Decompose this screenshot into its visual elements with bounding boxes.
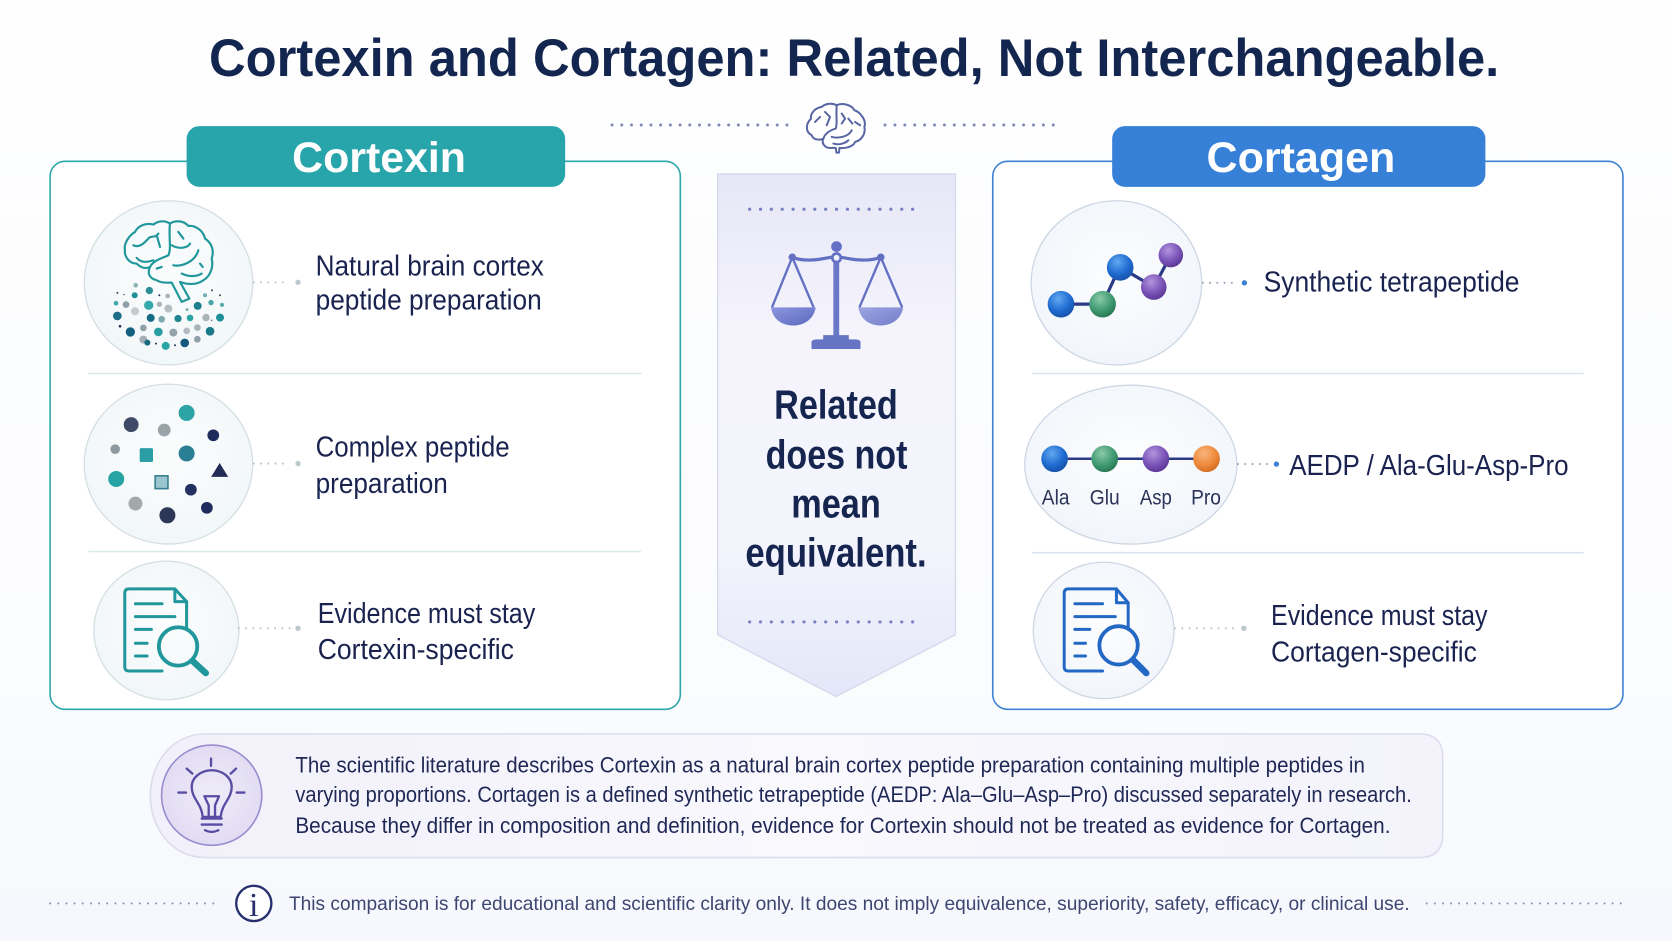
text: related does not mean equivalent: mean <box>791 480 881 526</box>
panel: explanation callout <box>150 734 1443 858</box>
text: related does not mean equivalent: equivalent. <box>745 529 927 575</box>
heading: Cortagen: Cortagen <box>1207 134 1395 182</box>
text: synthetic tetrapeptide: Synthetic tetrapeptide <box>1264 266 1520 298</box>
text: related does not mean equivalent: Related <box>774 381 898 427</box>
text: complex peptide <box>316 432 510 500</box>
panel: Cortexin <box>50 126 680 709</box>
text: evidence must stay cortexin-specific <box>318 598 536 666</box>
icon: info <box>236 886 271 924</box>
icon: AEDP chain <box>1025 385 1237 544</box>
text: natural brain cortex: peptide preparation <box>316 284 542 316</box>
text: related does not mean equivalent <box>745 381 927 575</box>
icon: balance scales <box>771 241 903 349</box>
text: explanation: The scientific literature describes Cortexin as a natural brain cortex peptide preparation containing multiple peptides in <box>295 752 1365 777</box>
text: natural brain cortex <box>316 250 544 316</box>
title: Cortexin and Cortagen: Related, Not Interchangeable. <box>209 29 1499 88</box>
text: natural brain cortex: Natural brain cortex <box>316 250 544 282</box>
text: complex peptide: preparation <box>316 468 448 500</box>
dotted divider with brain icon <box>612 104 1063 153</box>
icon: mixed peptides <box>84 384 253 544</box>
text: evidence must stay cortexin-specific: Evidence must stay <box>318 598 536 630</box>
icon: teal document with magnifier <box>94 561 239 700</box>
heading: Cortexin <box>187 126 565 187</box>
text: evidence must stay cortagen-specific: Evidence must stay <box>1271 600 1488 632</box>
icon: brain with peptide particles <box>84 201 253 365</box>
text: evidence must stay cortagen-specific <box>1271 600 1488 668</box>
icon: info: i <box>249 887 259 924</box>
text: explanation: Because they differ in composition and definition, evidence for Cortexin should not be treated as evidence for Cortagen. <box>295 813 1390 838</box>
text: disclaimer: This comparison is for educational and scientific clarity only. It does not imply equivalence, superiority, safety, efficacy, or clinical use. <box>289 893 1410 915</box>
text: evidence must stay cortexin-specific: Cortexin-specific <box>318 634 514 666</box>
icon: blue document with magnifier <box>1033 562 1174 699</box>
heading: Cortagen <box>1112 126 1485 187</box>
icon: AEDP chain: Glu <box>1090 487 1120 510</box>
heading: Cortexin: Cortexin <box>292 134 466 182</box>
text: explanation <box>295 752 1412 838</box>
icon: AEDP chain: Pro <box>1191 487 1221 510</box>
panel: central banner <box>718 174 955 697</box>
text: related does not mean equivalent: does not <box>766 431 907 477</box>
icon: branched tetrapeptide <box>1031 201 1202 365</box>
icon: AEDP chain: Asp <box>1140 487 1172 510</box>
text: AEDP sequence: AEDP / Ala-Glu-Asp-Pro <box>1289 450 1569 482</box>
icon: AEDP chain: Ala <box>1042 487 1070 510</box>
icon: light bulb <box>162 745 262 845</box>
icon: brain <box>807 104 865 153</box>
panel: Cortagen <box>993 126 1623 709</box>
text: evidence must stay cortagen-specific: Cortagen-specific <box>1271 636 1477 668</box>
footer disclaimer <box>50 886 1621 924</box>
text: explanation: varying proportions. Cortagen is a defined synthetic tetrapeptide (AEDP: Ala–Glu–Asp–Pro) discussed separately in research. <box>295 782 1412 807</box>
text: complex peptide: Complex peptide <box>316 432 510 464</box>
